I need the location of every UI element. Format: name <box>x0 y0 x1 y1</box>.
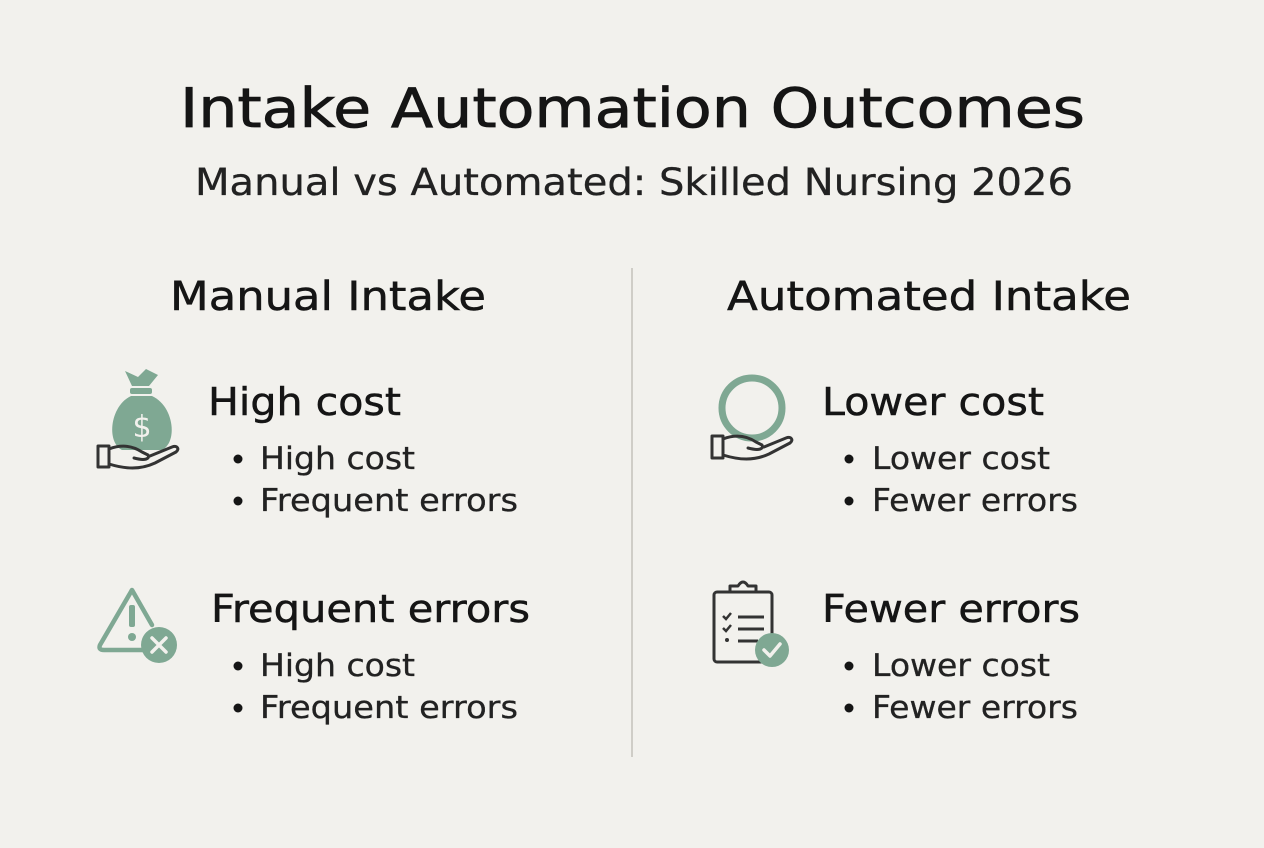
item: high cost: High cost <box>208 380 401 424</box>
item: high cost: Frequent errors <box>260 483 518 519</box>
item: lower cost: Lower cost <box>872 441 1050 477</box>
icon: money bag with hand: $ <box>132 410 152 445</box>
item: lower cost <box>822 380 1078 519</box>
item: fewer errors <box>822 587 1080 726</box>
subtitle: Manual vs Automated: Skilled Nursing 2026 <box>195 161 1073 204</box>
item: fewer errors: Lower cost <box>872 648 1050 684</box>
icon: ring with hand <box>712 378 792 459</box>
item: fewer errors: Fewer errors <box>872 690 1078 726</box>
panel: automated intake <box>712 274 1131 726</box>
panel: manual intake <box>98 274 530 726</box>
title: Intake Automation Outcomes <box>180 77 1085 140</box>
heading: manual intake: Manual Intake <box>170 274 486 320</box>
item: frequent errors: Frequent errors <box>211 587 530 631</box>
icon: money bag with hand <box>98 369 178 468</box>
item: lower cost: Fewer errors <box>872 483 1078 519</box>
item: fewer errors: Fewer errors <box>822 587 1080 631</box>
item: frequent errors: High cost <box>260 648 415 684</box>
item: lower cost: Lower cost <box>822 380 1044 424</box>
item: high cost <box>208 380 518 519</box>
item: frequent errors <box>211 587 530 726</box>
heading: automated intake: Automated Intake <box>727 274 1131 320</box>
item: frequent errors: Frequent errors <box>260 690 518 726</box>
icon: clipboard with check <box>714 582 789 667</box>
icon: warning with x <box>100 590 177 663</box>
item: high cost: High cost <box>260 441 415 477</box>
